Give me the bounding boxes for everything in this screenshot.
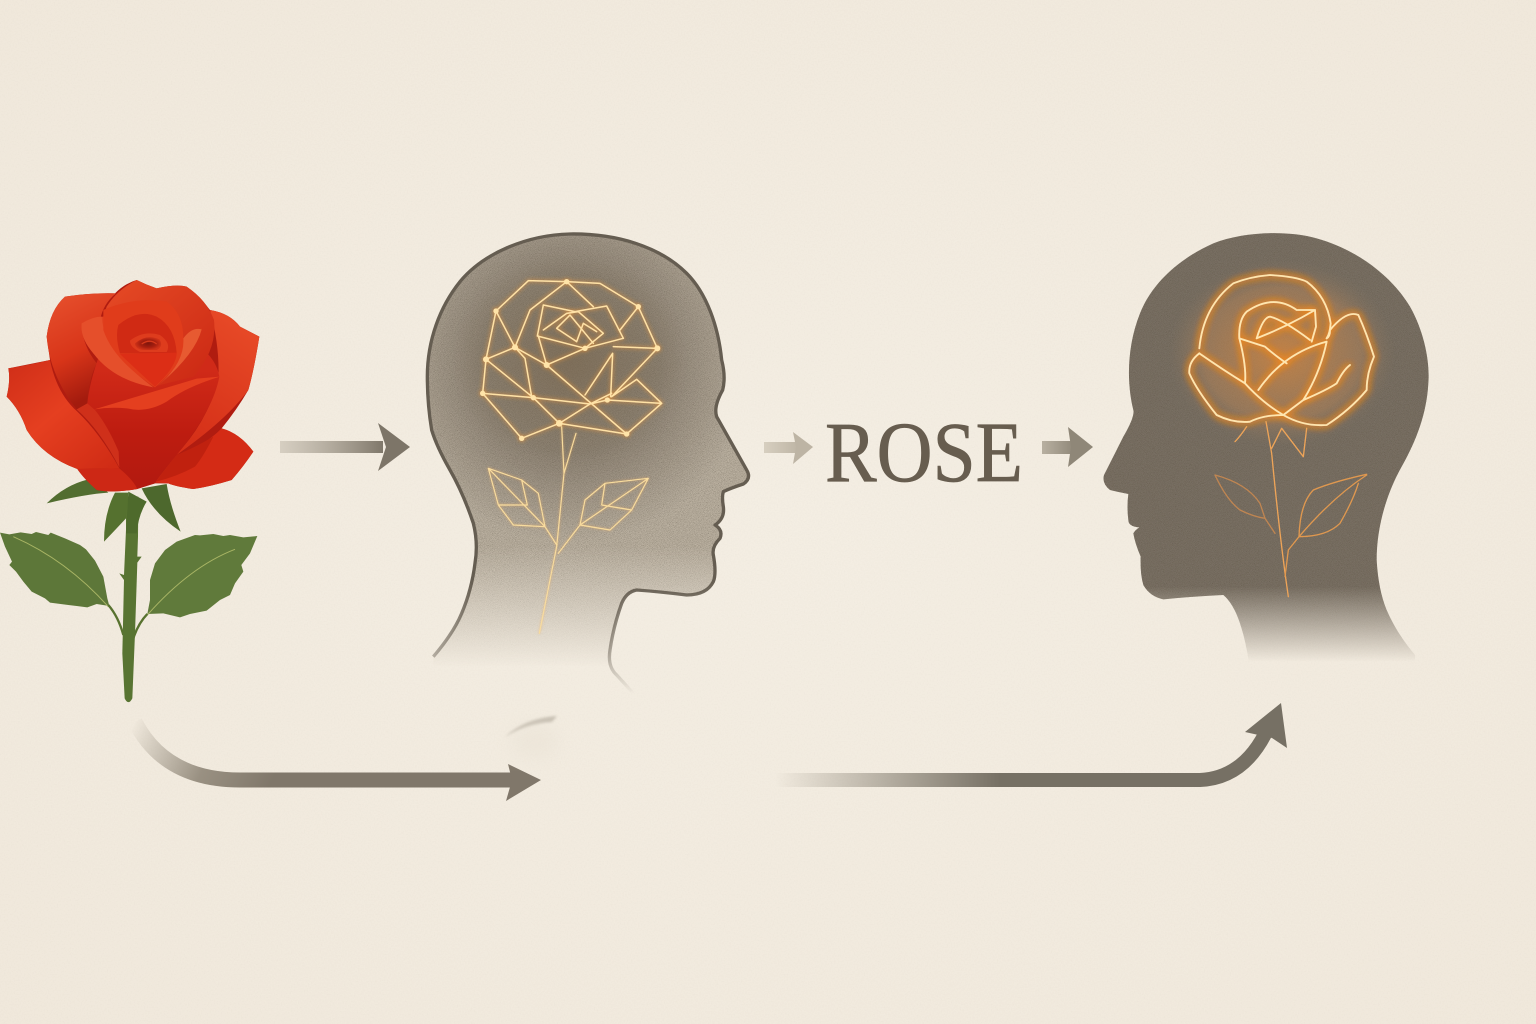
left leaf <box>0 532 123 635</box>
inner fold <box>156 437 213 482</box>
geometric rose network <box>480 279 662 441</box>
centre cup <box>77 347 219 488</box>
petal band <box>77 403 119 467</box>
arrow: rose to perceiving head <box>280 423 410 471</box>
geometric stem and leaves <box>488 427 648 633</box>
rose silhouette base <box>7 280 259 491</box>
sepals <box>47 479 181 542</box>
stem <box>119 497 142 702</box>
silhouette fill <box>1103 233 1429 673</box>
lower left petal <box>7 360 119 469</box>
rose illustration <box>0 280 259 702</box>
curved arrow: word to second head <box>775 703 1287 780</box>
head with glowing rose <box>1103 233 1429 673</box>
lip petal <box>94 377 220 410</box>
lower left bottom fold <box>77 468 137 491</box>
inner spiral petals <box>81 300 202 387</box>
right leaf <box>133 534 257 638</box>
top back petals <box>81 280 214 387</box>
arrow: word to listener head <box>1042 427 1093 467</box>
lower right petal <box>155 428 253 489</box>
head with geometric rose <box>427 234 749 697</box>
silhouette fill <box>427 234 749 697</box>
word: ROSE: ROSE <box>825 404 1023 500</box>
arrow: head to word <box>764 432 813 464</box>
smudge: fading shoulder mark <box>505 716 559 760</box>
right outer petal <box>175 310 259 456</box>
silhouette outline <box>427 234 749 693</box>
curved arrow: rose to first head <box>135 722 541 801</box>
upper left petal <box>47 293 116 410</box>
faint stem and leaves <box>1215 422 1367 597</box>
bright rose head <box>1189 275 1374 425</box>
